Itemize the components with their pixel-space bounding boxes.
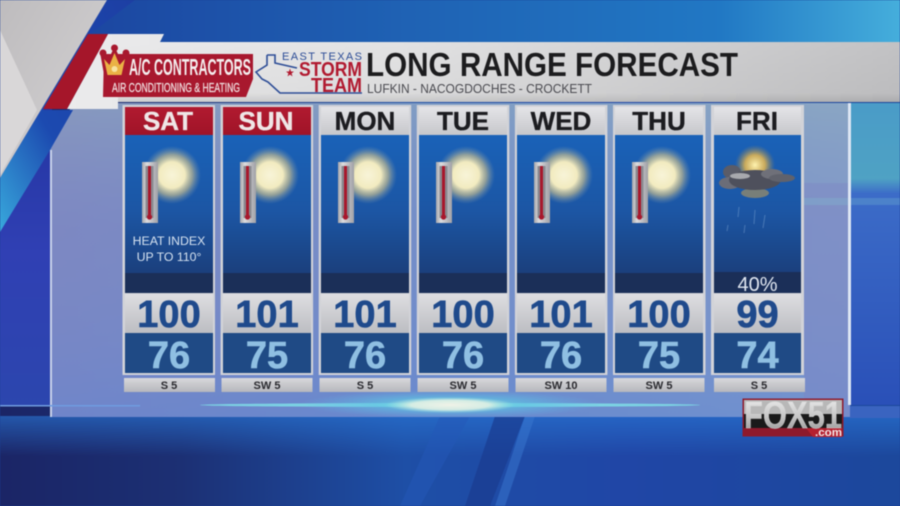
high temperature: 101 <box>529 294 593 336</box>
icon: thermometer <box>142 162 158 223</box>
wind: Saturday <box>124 378 215 392</box>
title bar <box>43 34 900 109</box>
icon: sun <box>241 146 299 204</box>
low temperature: 75 <box>246 335 288 377</box>
wind: Friday <box>714 378 805 392</box>
low temperature: 76 <box>442 335 484 377</box>
sponsor logo: A/C Contractors <box>100 44 253 97</box>
logo tagline: AIR CONDITIONING & HEATING <box>112 81 240 95</box>
panel: Friday <box>711 105 804 377</box>
FOX51 logo <box>742 395 844 439</box>
station name: FOX51 <box>744 395 842 437</box>
low temperature: 74 <box>736 335 779 377</box>
wind: Sunday <box>222 378 312 392</box>
panel: Thursday <box>613 105 706 377</box>
wind: Wednesday <box>516 378 606 392</box>
icon: thermometer <box>240 162 256 223</box>
day: FRI <box>736 106 778 136</box>
wind: Monday <box>320 378 410 392</box>
wind: Thursday <box>614 378 704 392</box>
high temperature: 101 <box>333 294 397 336</box>
panel: Tuesday <box>417 105 509 377</box>
wind: Tuesday: SW 5 <box>450 380 476 392</box>
day: MON <box>335 106 395 136</box>
high temperature: 100 <box>627 294 691 336</box>
left angled graphic <box>0 0 135 232</box>
day: SAT <box>143 106 193 136</box>
low temperature: 76 <box>148 335 190 377</box>
red diagonal stripe <box>43 34 108 109</box>
icon: thermometer <box>338 162 354 223</box>
day: TUE <box>437 106 489 136</box>
icon: sun <box>633 146 691 204</box>
logo line: Team: TEAM <box>311 75 362 97</box>
chance of rain: 40% <box>737 274 778 296</box>
logo line: Storm: STORM <box>299 59 362 81</box>
panel: Sunday <box>221 105 313 377</box>
icon: sun <box>437 146 495 204</box>
high temperature: 100 <box>431 294 495 336</box>
low temperature: 76 <box>540 335 582 377</box>
wind: Sunday: SW 5 <box>254 380 280 392</box>
icon: thermometer <box>436 162 452 223</box>
icon: crown <box>100 44 130 77</box>
low temperature: 76 <box>344 335 386 377</box>
wind: Thursday: SW 5 <box>646 380 672 392</box>
day: THU <box>632 106 686 136</box>
icon: sun <box>339 146 397 204</box>
wind: Monday: S 5 <box>357 380 373 392</box>
wind: Tuesday <box>418 378 508 392</box>
panel: Saturday: UP TO 110° <box>137 250 201 264</box>
icon: thermometer <box>534 162 550 223</box>
icon: thermometer <box>632 162 648 223</box>
wind: Saturday: S 5 <box>161 380 177 392</box>
heat index note: HEAT INDEX <box>133 234 205 248</box>
icon: sun <box>535 146 593 204</box>
high temperature: 100 <box>137 294 201 336</box>
wind: Friday: S 5 <box>751 380 767 392</box>
high temperature: 101 <box>235 294 299 336</box>
East Texas Storm Team logo <box>256 51 362 97</box>
panel: Monday <box>319 105 411 377</box>
wind: Wednesday: SW 10 <box>544 380 578 392</box>
icon: storm cloud with sun and rain <box>719 145 795 233</box>
logo line: East Texas: EAST TEXAS <box>282 51 362 63</box>
day: SUN <box>239 106 293 136</box>
icon: Texas outline <box>256 55 362 93</box>
day: WED <box>531 106 591 136</box>
title: LONG RANGE FORECAST <box>366 46 738 83</box>
high temperature: 99 <box>736 294 779 336</box>
low temperature: 75 <box>638 335 680 377</box>
icon: star <box>286 68 294 76</box>
panel: Saturday <box>122 105 215 377</box>
subtitle: LUFKIN - NACOGDOCHES - CROCKETT <box>367 81 592 96</box>
domain: .com <box>815 427 842 439</box>
panel: Wednesday <box>515 105 607 377</box>
logo name: A/C CONTRACTORS <box>129 54 251 80</box>
icon: sun <box>143 146 201 204</box>
